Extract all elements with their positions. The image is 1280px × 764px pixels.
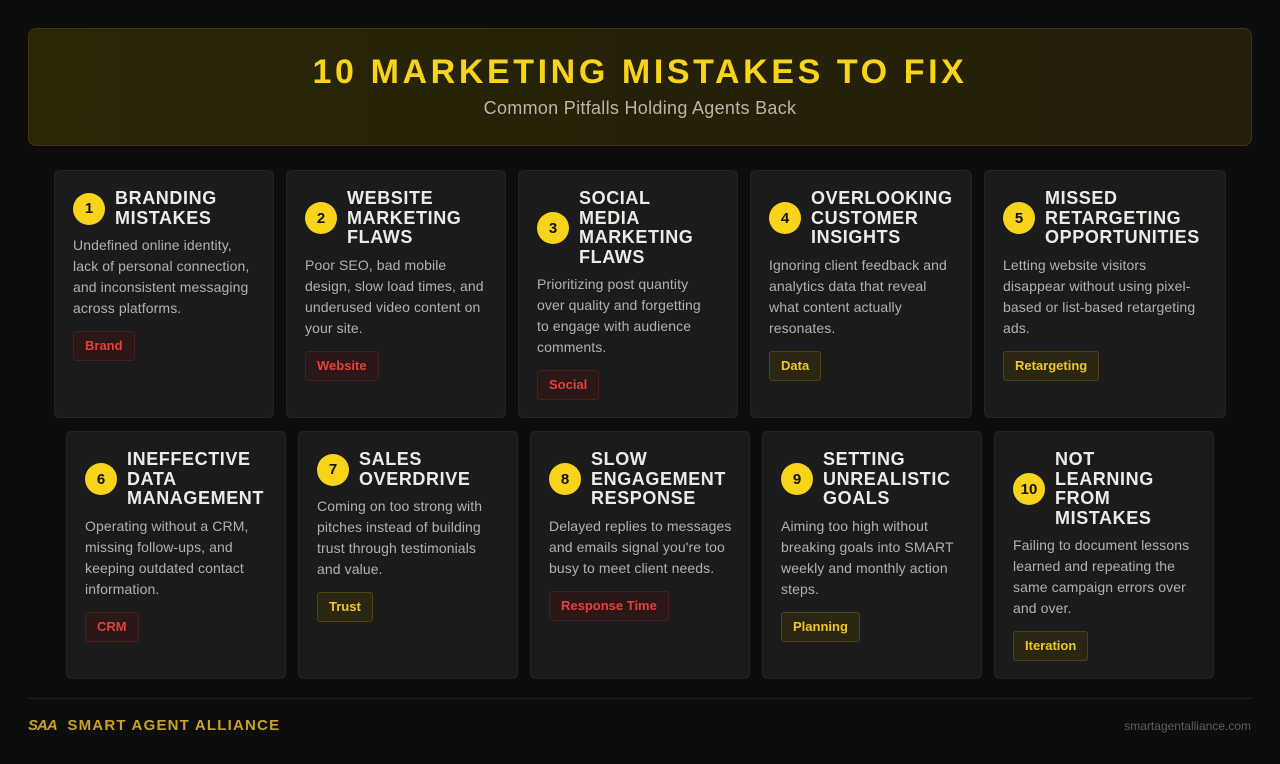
tag: CRM xyxy=(85,612,139,642)
card 9: breaking goals into SMART xyxy=(781,538,954,554)
card 10: Failing to document lessons xyxy=(1013,537,1189,553)
tag: Website: Website xyxy=(317,358,367,372)
card 1 xyxy=(54,170,274,418)
card 6: 6 xyxy=(97,471,105,488)
card 7: pitches instead of building xyxy=(317,519,481,535)
card 5: MISSED xyxy=(1045,188,1118,208)
card 5: based or list-based retargeting xyxy=(1003,298,1195,314)
card 8: and emails signal you're too xyxy=(549,538,725,554)
card 6 xyxy=(66,431,286,679)
card 2: design, slow load times, and xyxy=(305,278,484,294)
card 4: what content actually xyxy=(769,298,902,314)
card 6: DATA xyxy=(127,468,177,488)
card 6: Operating without a CRM, xyxy=(85,518,248,534)
card 10: MISTAKES xyxy=(1055,508,1151,528)
card 7: and value. xyxy=(317,561,383,577)
tag: Data xyxy=(769,350,821,380)
card 1: BRANDING xyxy=(115,188,217,208)
card 9: weekly and monthly action xyxy=(781,560,948,576)
card 3: to engage with audience xyxy=(537,318,691,334)
card 2: FLAWS xyxy=(347,227,413,247)
footer url: smartagentalliance.com xyxy=(1124,719,1251,733)
card 5: OPPORTUNITIES xyxy=(1045,227,1200,247)
header banner xyxy=(28,28,1252,146)
card 2: 2 xyxy=(317,210,325,227)
tag: Brand: Brand xyxy=(85,338,123,353)
tag: Social: Social xyxy=(549,377,587,392)
card 3: 3 xyxy=(549,220,557,236)
tag: Trust: Trust xyxy=(329,599,361,614)
card 7: OVERDRIVE xyxy=(359,468,470,488)
card 3: SOCIAL xyxy=(579,188,651,208)
card 2: underused video content on xyxy=(305,298,480,314)
card 8: Delayed replies to messages xyxy=(549,518,731,534)
card 4: Ignoring client feedback and xyxy=(769,256,947,272)
card 10: 10 xyxy=(1021,480,1037,498)
card 3: FLAWS xyxy=(579,246,645,266)
tag: Retargeting xyxy=(1003,350,1099,380)
tag: Iteration: Iteration xyxy=(1025,638,1076,653)
card 5: Letting website visitors xyxy=(1003,256,1146,272)
card 6: missing follow-ups, and xyxy=(85,538,233,554)
card 7 xyxy=(298,431,518,679)
tag: Iteration xyxy=(1013,631,1088,661)
card 7: 7 xyxy=(329,461,337,478)
subtitle: Common Pitfalls Holding Agents Back xyxy=(484,98,796,118)
card 4: OVERLOOKING xyxy=(811,188,953,208)
card 2: WEBSITE xyxy=(347,188,433,208)
card 9: UNREALISTIC xyxy=(823,468,951,488)
card 9: GOALS xyxy=(823,488,890,508)
card 3: Prioritizing post quantity xyxy=(537,276,688,292)
card 4: CUSTOMER xyxy=(811,208,918,228)
card 10: FROM xyxy=(1055,488,1110,508)
card 9: 9 xyxy=(793,471,801,488)
title: 10 MARKETING MISTAKES TO FIX xyxy=(313,53,967,91)
card 4: INSIGHTS xyxy=(811,227,901,247)
card 3: over quality and forgetting xyxy=(537,297,701,313)
card 2: your site. xyxy=(305,320,363,336)
tag: CRM: CRM xyxy=(97,618,127,634)
footer logo: SAA SMART AGENT ALLIANCE xyxy=(28,717,280,734)
card 9 xyxy=(762,431,982,679)
card 8: busy to meet client needs. xyxy=(549,560,714,576)
tag: Website xyxy=(305,350,379,380)
card 10: NOT xyxy=(1055,449,1095,469)
card 3: comments. xyxy=(537,339,606,355)
tag: Brand xyxy=(73,331,135,361)
tag: Planning xyxy=(781,612,860,642)
tag: Trust xyxy=(317,592,373,622)
card 5 xyxy=(984,170,1226,418)
card 5: RETARGETING xyxy=(1045,208,1181,228)
card 8 xyxy=(530,431,750,679)
card 2: MARKETING xyxy=(347,208,461,228)
card 2 xyxy=(286,170,506,418)
tag: Retargeting: Retargeting xyxy=(1015,358,1087,372)
tag: Response Time: Response Time xyxy=(561,598,657,612)
card 1: MISTAKES xyxy=(115,208,211,228)
card 7: Coming on too strong with xyxy=(317,498,482,514)
card 6: keeping outdated contact xyxy=(85,560,244,576)
card 9: SETTING xyxy=(823,449,905,469)
card 9: Aiming too high without xyxy=(781,518,928,534)
card 4 xyxy=(750,170,972,418)
card 6: MANAGEMENT xyxy=(127,488,264,508)
card 1: and inconsistent messaging xyxy=(73,279,248,295)
card 3: MARKETING xyxy=(579,227,693,247)
card 5: disappear without using pixel- xyxy=(1003,278,1190,294)
card 10: LEARNING xyxy=(1055,468,1154,488)
card 6: information. xyxy=(85,580,159,596)
tag: Data: Data xyxy=(781,358,809,372)
card 5: ads. xyxy=(1003,320,1030,336)
card 6: INEFFECTIVE xyxy=(127,449,251,469)
card 8: RESPONSE xyxy=(591,488,696,508)
card 1: Undefined online identity, xyxy=(73,237,232,253)
card 1: lack of personal connection, xyxy=(73,258,249,274)
card 7: trust through testimonials xyxy=(317,540,476,556)
tag: Planning: Planning xyxy=(793,618,848,634)
card 8: ENGAGEMENT xyxy=(591,468,726,488)
card 5: 5 xyxy=(1015,210,1023,227)
card 9: steps. xyxy=(781,580,819,596)
card 4: analytics data that reveal xyxy=(769,278,926,294)
card 2: Poor SEO, bad mobile xyxy=(305,256,446,272)
card 4: 4 xyxy=(781,210,789,227)
card 3: MEDIA xyxy=(579,208,640,228)
tag: Response Time xyxy=(549,590,669,620)
card 8: SLOW xyxy=(591,449,647,469)
card 7: SALES xyxy=(359,449,422,469)
card 10: and over. xyxy=(1013,600,1072,616)
card 10 xyxy=(994,431,1214,679)
card 4: resonates. xyxy=(769,320,835,336)
card 10: same campaign errors over xyxy=(1013,579,1186,595)
card 8: 8 xyxy=(561,471,569,488)
card 1: 1 xyxy=(85,200,93,217)
card 10: learned and repeating the xyxy=(1013,558,1175,574)
tag: Social xyxy=(537,370,599,400)
card 3 xyxy=(518,170,738,418)
card 1: across platforms. xyxy=(73,300,181,316)
